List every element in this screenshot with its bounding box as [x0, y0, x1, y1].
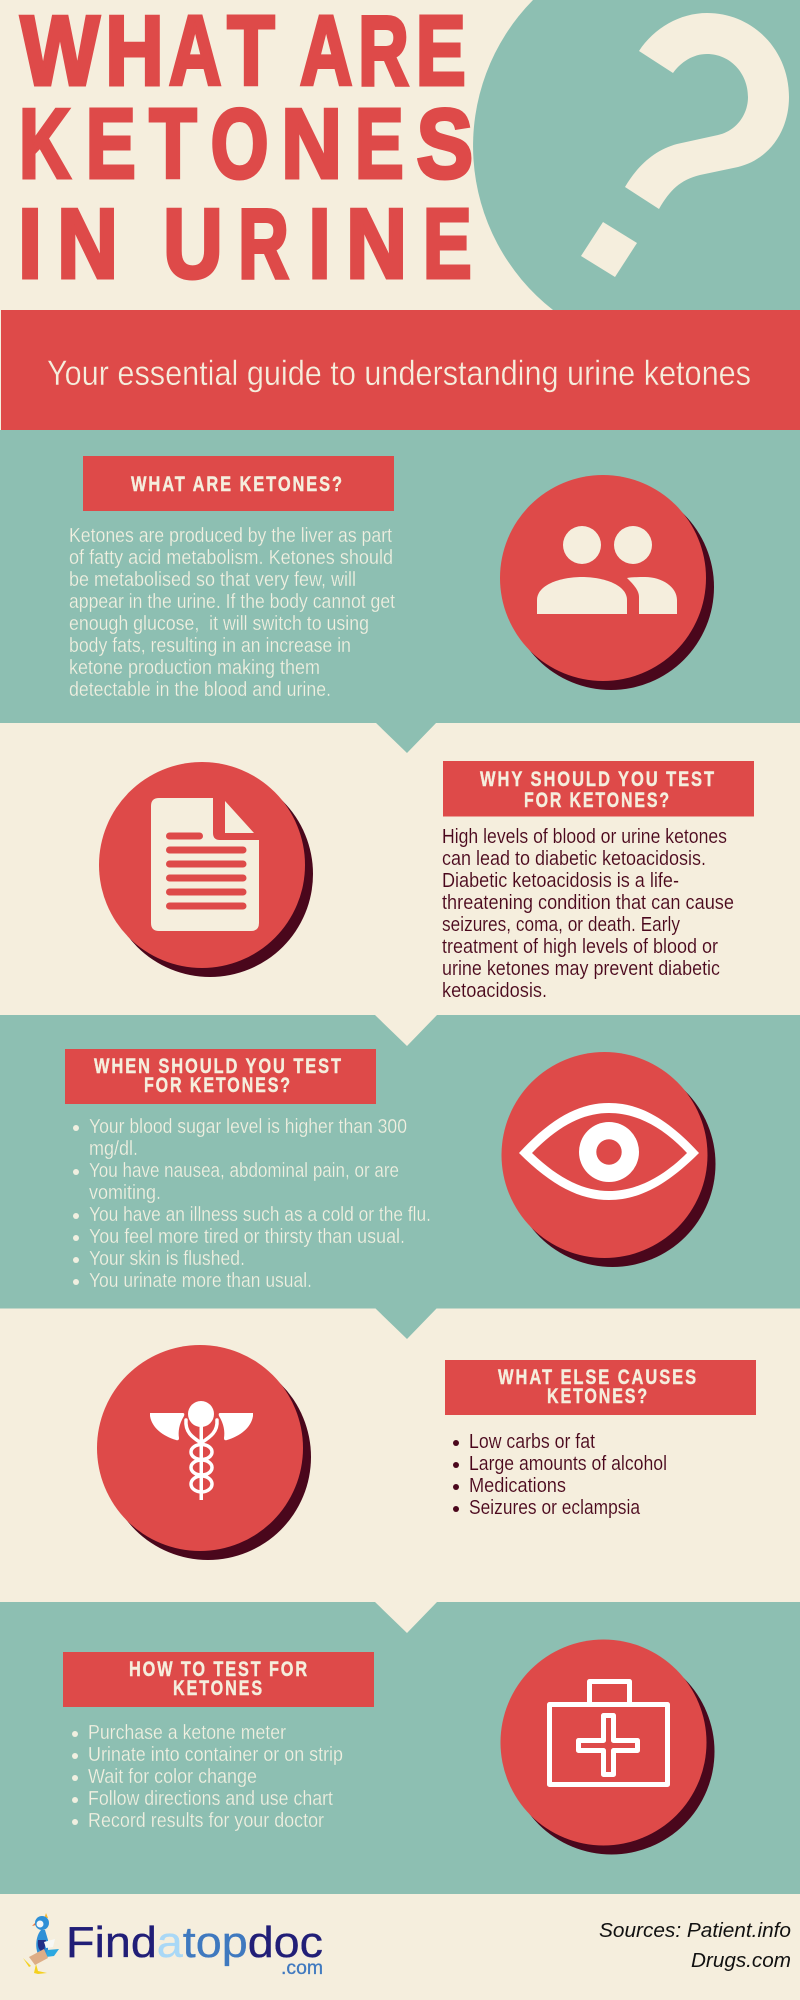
list: what else causes: Large amounts of alcohol	[469, 1453, 667, 1475]
list: how to test: Urinate into container or on strip	[88, 1744, 343, 1766]
heading: what else causes: WHAT ELSE CAUSES	[498, 1365, 698, 1389]
text block: what are ketones: Ketones are produced by the liver as part	[69, 525, 392, 547]
title: N	[346, 188, 407, 298]
title: E	[423, 188, 472, 298]
title: I	[309, 188, 330, 298]
logo wordmark: Findatopdoc	[66, 1918, 323, 1967]
title: N	[57, 188, 118, 298]
header panel	[18, 0, 800, 310]
title: S	[417, 88, 473, 198]
sources	[599, 1920, 791, 1972]
list: what else causes: Medications	[469, 1475, 566, 1497]
icon: people	[500, 475, 714, 690]
title	[18, 0, 473, 298]
banner	[1, 310, 800, 430]
title: R	[238, 188, 289, 298]
text block: why should you test: urine ketones may prevent diabetic	[442, 958, 720, 980]
title: E	[86, 88, 136, 198]
heading: when should you test	[65, 1049, 376, 1104]
heading: what are ketones: WHAT ARE KETONES?	[131, 472, 344, 496]
list: when should you test: You have an illness such as a cold or the flu.	[89, 1204, 431, 1226]
icon: duck mascot	[23, 1913, 59, 1974]
text block: what are ketones: appear in the urine. If the body cannot get	[69, 591, 395, 613]
list: when should you test: Your blood sugar level is higher than 300	[89, 1116, 407, 1138]
text block: why should you test: threatening condition that can cause	[442, 892, 734, 914]
text block: why should you test	[442, 826, 734, 1002]
heading: when should you test: WHEN SHOULD YOU TEST	[94, 1054, 343, 1078]
list: when should you test: vomiting.	[89, 1182, 161, 1204]
footer	[0, 1894, 800, 2000]
text block: why should you test: Diabetic ketoacidosis is a life-	[442, 870, 679, 892]
list: when should you test: You feel more tired or thirsty than usual.	[89, 1226, 405, 1248]
icon: document	[99, 762, 313, 977]
icon: teal circle with question mark	[473, 0, 800, 310]
list: when should you test: Your skin is flushed.	[89, 1248, 245, 1270]
panel: what else causes	[0, 1308, 800, 1602]
title: I	[18, 188, 42, 298]
heading: what else causes: KETONES?	[547, 1384, 649, 1408]
title: N	[281, 88, 342, 198]
text block: what are ketones: be metabolised so that very few, will	[69, 569, 356, 591]
list: when should you test: mg/dl.	[89, 1138, 138, 1160]
heading: how to test: HOW TO TEST FOR	[129, 1657, 309, 1681]
panel: when should you test	[0, 1015, 800, 1308]
list: when should you test	[73, 1116, 431, 1292]
heading: why should you test: FOR KETONES?	[524, 788, 671, 812]
icon: caduceus	[97, 1345, 311, 1560]
logo wordmark: .com	[281, 1958, 323, 1979]
title: O	[211, 88, 268, 198]
text block: why should you test: can lead to diabetic ketoacidosis.	[442, 848, 706, 870]
panel: why should you test	[0, 722, 800, 1015]
heading: why should you test: WHY SHOULD YOU TEST	[480, 767, 716, 791]
list: how to test	[72, 1722, 343, 1832]
icon: eye	[502, 1052, 716, 1267]
panel: how to test	[0, 1602, 800, 1894]
text block: why should you test: treatment of high levels of blood or	[442, 936, 718, 958]
heading: why should you test	[443, 761, 754, 816]
heading: when should you test: FOR KETONES?	[144, 1073, 292, 1097]
text block: what are ketones: detectable in the blood and urine.	[69, 679, 331, 701]
text block: why should you test: seizures, coma, or death. Early	[442, 914, 680, 936]
text block: what are ketones: ketone production making them	[69, 657, 320, 679]
text block: what are ketones	[69, 525, 395, 701]
list: what else causes: Seizures or eclampsia	[469, 1497, 641, 1519]
text block: what are ketones: of fatty acid metabolism. Ketones should	[69, 547, 393, 569]
text block: why should you test: High levels of blood or urine ketones	[442, 826, 727, 848]
list: how to test: Purchase a ketone meter	[88, 1722, 286, 1744]
heading: how to test: KETONES	[173, 1676, 264, 1700]
list: how to test: Wait for color change	[88, 1766, 257, 1788]
text block: what are ketones: body fats, resulting in an increase in	[69, 635, 351, 657]
text block: why should you test: ketoacidosis.	[442, 980, 547, 1002]
list: how to test: Record results for your doctor	[88, 1810, 324, 1832]
list: what else causes: Low carbs or fat	[469, 1431, 595, 1453]
title: E	[355, 88, 404, 198]
heading: what else causes	[445, 1360, 756, 1415]
list: how to test: Follow directions and use chart	[88, 1788, 333, 1810]
heading: what are ketones	[83, 456, 394, 511]
title: K	[19, 88, 70, 198]
title: U	[163, 188, 223, 298]
icon: first aid kit	[500, 1640, 714, 1854]
sources: Sources: Patient.info	[599, 1920, 791, 1942]
list: when should you test: You urinate more than usual.	[89, 1270, 312, 1292]
panel: what are ketones	[0, 430, 800, 753]
list: what else causes	[453, 1431, 667, 1519]
list: when should you test: You have nausea, abdominal pain, or are	[89, 1160, 399, 1182]
heading: how to test	[63, 1652, 374, 1707]
title: T	[149, 88, 197, 198]
text block: what are ketones: enough glucose, it will switch to using	[69, 613, 369, 635]
sources: Drugs.com	[691, 1950, 791, 1972]
